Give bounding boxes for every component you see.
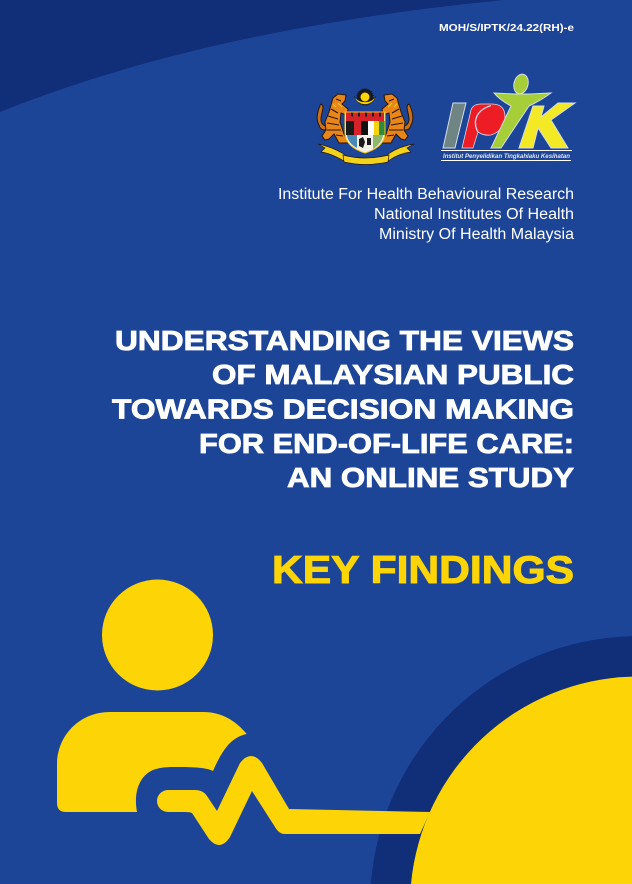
right tiger	[381, 94, 413, 143]
institute address block: Ministry Of Health Malaysia	[379, 226, 574, 243]
dark ring behind yellow circle	[371, 636, 632, 884]
title: AN ONLINE STUDY	[287, 462, 574, 493]
document reference code: MOH/S/IPTK/24.22(RH)-e	[439, 22, 574, 34]
institute address block	[278, 186, 574, 243]
icon: person with heartbeat line	[57, 580, 430, 845]
motto ribbon	[318, 144, 414, 164]
left tiger	[317, 94, 349, 143]
title: OF MALAYSIAN PUBLIC	[212, 359, 574, 390]
title: TOWARDS DECISION MAKING	[112, 394, 574, 424]
shield	[345, 112, 385, 153]
person body	[57, 712, 247, 812]
logo rule lines	[441, 150, 572, 151]
title	[112, 325, 574, 493]
icon: Malaysian coat of arms	[317, 89, 414, 164]
subtitle: key findings: KEY FINDINGS	[272, 549, 574, 592]
letter T figure	[491, 93, 551, 148]
logo caption: Institut Penyelidikan Tingkahlaku Kesihatan	[443, 153, 570, 160]
title: FOR END-OF-LIFE CARE:	[199, 428, 574, 459]
figure head	[512, 73, 530, 95]
crescent	[354, 96, 376, 105]
icon: IPTK logo	[441, 73, 575, 161]
institute address block: Institute For Health Behavioural Research	[278, 186, 574, 203]
letter P	[462, 104, 505, 148]
heartbeat line	[157, 756, 430, 845]
letter I	[443, 103, 466, 148]
top-left dark corner shape	[0, 0, 504, 112]
letter K	[519, 103, 575, 148]
yellow quarter circle	[411, 677, 632, 884]
person head	[102, 580, 213, 690]
institute address block: National Institutes Of Health	[374, 206, 574, 223]
sun	[357, 89, 373, 105]
title: UNDERSTANDING THE VIEWS	[115, 325, 574, 356]
